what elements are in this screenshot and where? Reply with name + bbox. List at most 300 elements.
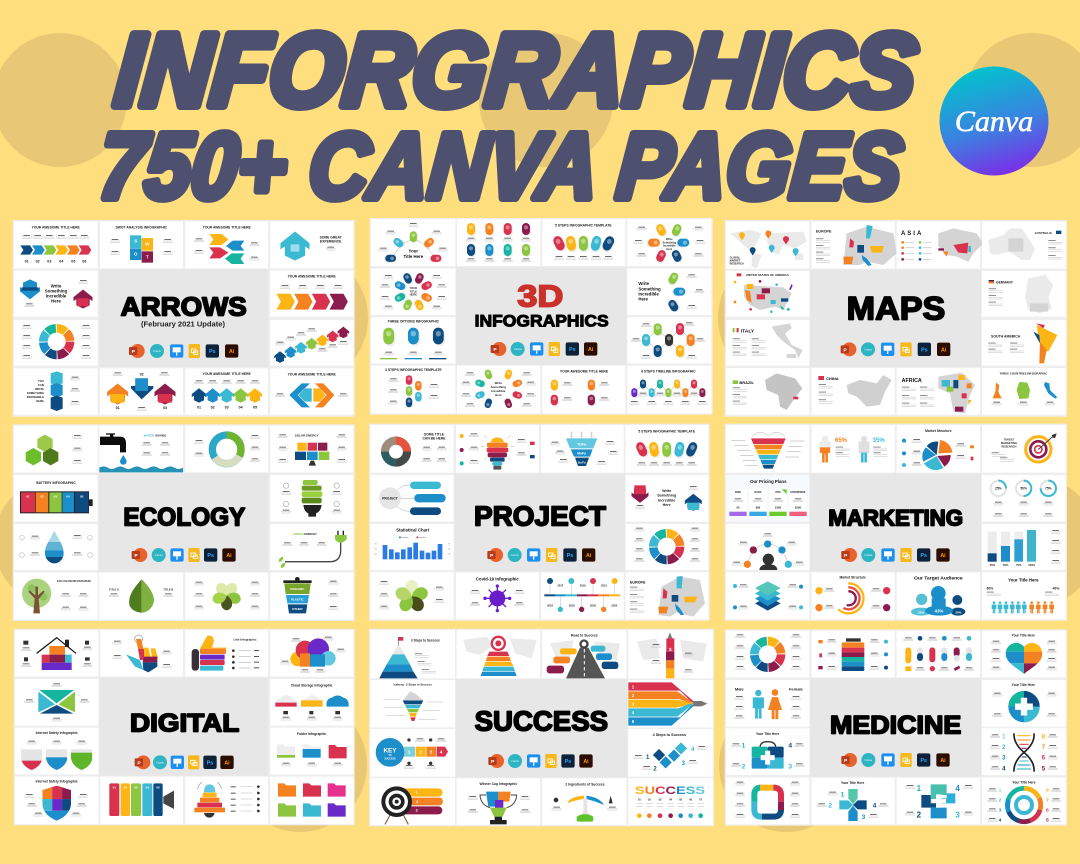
centre card: ARROWS: (February 2021 Update) <box>141 322 225 329</box>
tile: pointing hand <box>100 630 183 677</box>
tile: eight capsule ring: Here <box>495 393 502 397</box>
tile: DNA: 8 <box>1042 733 1046 740</box>
tile: six arrows: 06 <box>82 259 86 263</box>
tile: leaf: TITLE B <box>163 588 173 592</box>
centre card: ECOLOGY: ECOLOGY <box>123 504 246 531</box>
tile: rocket bands: 4 <box>632 710 635 715</box>
icon: Canva badge <box>940 66 1048 176</box>
icon row: software apps: Ps <box>920 553 927 559</box>
tile: medical kit <box>726 728 809 775</box>
tile: ribbons: YOU <box>38 379 44 383</box>
tile: four-part ring: CAN BE HERE <box>423 436 446 440</box>
tile: percent rings: 50% <box>1020 487 1027 491</box>
tile: target: RESEARCH <box>1002 444 1017 448</box>
tile: SWOT: W <box>145 241 150 246</box>
tile: arrow ring <box>14 320 98 366</box>
tile: ribbons <box>14 368 98 415</box>
icon row: software apps: P <box>137 760 141 766</box>
tile: cross leaves: 1 <box>841 792 845 799</box>
tile: global map: MARKET <box>730 259 741 262</box>
tile: bulb <box>456 425 539 473</box>
tile: capsule arc <box>371 219 455 266</box>
icon row: software apps: Ps <box>207 553 214 559</box>
tile: eight step cross ring: 5 <box>1046 817 1049 823</box>
tile: percent rings: 25% <box>995 487 1002 491</box>
tile: road: Road to Success <box>571 633 598 637</box>
icon row: software apps: Ai <box>586 553 592 559</box>
tile: eight capsule ring: Incredible <box>491 389 506 393</box>
tile: six arrows: 01 <box>25 259 29 263</box>
tile: write something: Incredible <box>46 293 67 298</box>
tile: six arrows: 02 <box>36 259 40 263</box>
centre card: MEDICINE <box>810 678 981 777</box>
tile: Europe map <box>812 222 897 269</box>
tile: green energy plug <box>270 524 353 570</box>
tile: eight petals: YOUR <box>409 286 417 290</box>
tile: mountain <box>370 630 455 678</box>
tile: cloud storage: Cloud Storage Infographic <box>291 683 333 687</box>
panel: ecology <box>13 424 355 621</box>
icon row: software apps: Canva <box>153 349 161 353</box>
tile: ribbons: SOMETHING <box>27 391 45 395</box>
icon row: software apps: Canva <box>155 553 163 557</box>
tile: cross leaves: Your Title Here <box>841 781 864 785</box>
tile: rising arrows <box>270 320 353 366</box>
panel: success <box>369 629 714 826</box>
centre card: ECOLOGY <box>99 473 268 572</box>
tile: DNA <box>982 728 1066 775</box>
tile: key to success: 2 <box>419 750 422 755</box>
tile: iceberg <box>370 680 455 727</box>
tile: Brazil map <box>726 368 809 415</box>
tile: like thumb: Like Infographic <box>233 637 257 641</box>
tile: five arrows: 02 <box>211 406 215 410</box>
icon row: software apps <box>488 754 593 768</box>
tile: three big arrows: 03 <box>163 406 167 410</box>
tile: project mind map: PROJECT <box>382 497 398 501</box>
tile: six capsules ring <box>627 219 711 266</box>
tile: safety shield <box>15 777 98 824</box>
tile: road <box>542 630 626 678</box>
tile: recycling bin: ORGANIC <box>290 587 305 591</box>
tile: write something <box>14 271 98 317</box>
tile: three big arrows: 01 <box>116 406 120 410</box>
tile: rocket tower <box>628 630 713 678</box>
tile: plus: 2 <box>917 811 922 820</box>
tile: medical kit: 1 <box>742 743 746 750</box>
tile: pricing plans: BASIC <box>754 491 762 494</box>
tile: target pills <box>370 778 455 825</box>
tile: SWOT: S <box>134 239 137 244</box>
tile: medical ring <box>726 631 809 677</box>
panel: medicine <box>725 629 1067 826</box>
tile: six arrows: YOUR AWESOME TITLE HERE <box>32 226 81 230</box>
tile: write something: Here <box>51 298 61 303</box>
tile: timeline: 2022 <box>611 604 618 608</box>
tile: timeline: 2019 <box>580 584 586 588</box>
tile: write something: Write <box>51 283 62 288</box>
tile: cylinder bars: 75% <box>1016 563 1022 567</box>
tile: iceberg: Iceberg - 5 Steps to Success <box>393 682 432 686</box>
tile: market pie: Market Structure <box>925 429 952 433</box>
centre card: PROJECT <box>454 473 625 572</box>
tile: Europe map: EUROPE <box>816 230 832 234</box>
tile: solar energy: SOLAR ENERGY <box>295 433 319 437</box>
tile: eco bulb <box>270 475 353 522</box>
tile: medical kit: 2 <box>742 763 746 770</box>
tile: pricing plans: $299 <box>795 506 801 510</box>
tile: video camera panels: 01 <box>113 785 116 789</box>
tile: five capsules <box>626 425 708 473</box>
tile: DNA: 7 <box>1042 744 1046 751</box>
tile: head arc <box>726 524 809 570</box>
tile: recycling bin: OTHER <box>292 607 303 611</box>
tile: three big arrows <box>100 368 183 415</box>
centre card: MEDICINE: MEDICINE <box>830 713 961 740</box>
icon row: software apps: Ai <box>588 347 594 353</box>
tile: five arrows: 05 <box>253 406 257 410</box>
icon row: software apps: P <box>132 349 136 355</box>
tile: ribbons: HERE <box>36 399 44 403</box>
tile: percent rings: 75% <box>1045 487 1052 491</box>
tile: target <box>982 425 1066 473</box>
tile: eight step cross ring: Your Title Here <box>1012 781 1036 785</box>
tile: Germany map: GERMANY <box>996 280 1014 284</box>
tile: people row: 60% <box>987 587 993 591</box>
tile: six arrows: 04 <box>59 259 64 263</box>
tile: mountain: 3 Steps to Success <box>411 638 440 642</box>
tile: write something capsules: Here <box>638 297 649 302</box>
tile: two ingredients: 2 Ingredients of Success <box>565 782 605 786</box>
tile: two-tone capsules <box>897 631 980 677</box>
tile: water drop <box>14 524 98 570</box>
tile: folder infographic: Folder Infographic <box>297 732 326 736</box>
tile: Italy map: ITALY <box>741 328 755 334</box>
tile: Australia map: AUSTRALIA <box>1035 231 1053 235</box>
tile: DNA: 6 <box>1042 755 1046 762</box>
tile: Germany map <box>982 271 1066 317</box>
tile: global map: GLOBAL <box>730 256 741 259</box>
tile: four steps to success: 4 <box>691 747 695 753</box>
tile: six capsules ring: Incredible <box>663 244 676 248</box>
tile: plus: 3 <box>955 811 960 820</box>
tile: funnel: BoFu <box>578 460 586 464</box>
tile: key to success: TO <box>388 755 392 757</box>
tile: eight step cross ring: 6 <box>1046 808 1049 814</box>
tile: success letters: 04 <box>669 799 673 802</box>
tile: pricing plans: $199 <box>775 506 781 510</box>
tile: male and female: Female <box>789 686 804 691</box>
icon row: software apps: P <box>134 553 138 559</box>
tile: battery: 01 <box>26 494 30 498</box>
tile: Europe map <box>626 572 708 619</box>
tile: Brazil map: BRAZIL <box>739 380 755 385</box>
tile: eight petals <box>371 269 455 315</box>
tile: cross leaves: 3 <box>862 814 866 821</box>
tile: four steps to success <box>628 729 713 777</box>
icon row: software apps: Ai <box>226 553 232 559</box>
tile: six folders <box>270 777 353 824</box>
tile: success letters: 01 <box>638 799 641 802</box>
tile: pricing plans: $99 <box>756 506 761 510</box>
icon row: software apps: Ps <box>569 347 576 353</box>
title: two-line headline: INFORGRAPHICS <box>111 13 921 127</box>
tile: eight step cross ring: 8 <box>1046 788 1049 794</box>
tile: success letters <box>628 778 713 825</box>
tile: plus: 1 <box>917 784 922 793</box>
tile: medical kit: Your Title Here <box>756 732 779 736</box>
tile: four-part ring: SOME TITLE <box>424 432 445 436</box>
tile: capsule arc: Title Here <box>404 254 424 259</box>
tile: three big arrows: 02 <box>140 372 144 376</box>
title: two-line headline: 750+ CANVA PAGES <box>95 114 906 218</box>
tile: DNA: 5 <box>1042 765 1046 772</box>
tile: capsule arc: Your <box>409 249 418 254</box>
icon row: software apps <box>841 342 950 356</box>
tile: six capsules with hub <box>627 317 711 363</box>
centre card: DIGITAL <box>99 677 268 776</box>
icon row: software apps <box>135 755 234 769</box>
tile: battery: 04 <box>66 494 70 498</box>
centre card: SUCCESS: SUCCESS <box>475 705 608 736</box>
tile: target audience: 32% <box>918 610 924 614</box>
tile: five arrows: YOUR AWESOME TITLE HERE <box>203 372 252 376</box>
tile: target audience: Our Target Audience <box>914 576 963 582</box>
tile: video camera panels: 04 <box>146 785 149 789</box>
tile: write something capsules: Incredible <box>638 292 659 297</box>
icon row: software apps: Canva <box>864 758 873 762</box>
tile: percent people: 65% <box>835 438 848 444</box>
tile: Australia map <box>982 222 1066 269</box>
tile: tree: ECO CHAIN INFOGRAPHIC <box>57 579 91 583</box>
icon: Canva badge: Canva <box>955 105 1033 138</box>
tile: timeline: 2021 <box>601 584 607 588</box>
tile: rocket bands <box>628 680 713 727</box>
tile: green energy plug: GREEN ENERGY <box>293 532 317 536</box>
tile: five arrows: 01 <box>197 406 201 410</box>
tile: write something capsules: Something <box>638 286 661 291</box>
tile: four capsules: YOUR AWESOME TITLE HERE <box>560 370 609 374</box>
tile: China map: CHINA <box>826 376 839 381</box>
tile: four steps to success: 3 <box>682 761 686 767</box>
tile: six arrows: 03 <box>47 259 51 263</box>
icon row: software apps: P <box>844 758 848 764</box>
tile: target audience: 25% <box>955 610 962 614</box>
panel: 3D infographics <box>370 218 713 415</box>
tile: envelope <box>15 679 98 726</box>
tile: eight capsule ring: Write <box>495 381 502 385</box>
tile: five petal flower <box>370 572 454 619</box>
tile: radial arcs: Market Structure <box>839 575 866 579</box>
tile: target pills: 3 <box>416 809 418 813</box>
tile: like thumb <box>185 630 268 677</box>
icon row: software apps <box>487 548 595 562</box>
tile: write something capsules <box>627 269 711 315</box>
tile: folder infographic <box>270 728 353 774</box>
tile: eight step cross ring <box>982 778 1066 824</box>
tile: pricing plans: $0 <box>737 506 740 510</box>
tile: opposing chevrons: YOUR AWESOME TITLE HERE <box>288 372 337 376</box>
tile: crossing arrows <box>185 222 268 268</box>
tile: target pills: 2 <box>416 800 418 804</box>
tile: pricing plans: FREE <box>735 492 742 494</box>
tile: success letters: 03 <box>659 799 662 802</box>
tile: recycle <box>14 426 98 472</box>
tile: rocket bands: 5 <box>632 719 635 724</box>
tile: covid infographic: Covid-19 Infographic <box>476 576 519 581</box>
tile: internet safety shields <box>15 728 98 774</box>
icon row: software apps: Canva <box>511 759 519 763</box>
tile: cloud puzzle <box>270 630 353 677</box>
tile: key to success: KEY <box>383 747 397 754</box>
tile: covid infographic <box>456 572 539 619</box>
tile: stacked layers <box>726 572 809 619</box>
tile: winner cup <box>457 778 540 825</box>
centre card: MAPS <box>810 269 981 367</box>
tile: five arrows: 03 <box>225 406 229 410</box>
tile: SWOT <box>100 222 183 268</box>
tile: battery: 02 <box>40 494 44 498</box>
centre card: MARKETING <box>810 473 981 572</box>
tile: three step capsules: 3 STEPS INFOGRAPHIC TEMPLATE <box>385 368 442 372</box>
tile: target: TARGET <box>1004 438 1015 442</box>
tile: success letters: 05 <box>679 799 683 802</box>
tile: cross leaves <box>812 778 895 824</box>
tile: big up arrow: EXPERIENCE <box>320 240 342 244</box>
tile: Africa map: AFRICA <box>902 378 922 384</box>
tile: square cross ring <box>726 778 809 824</box>
tile: four-part ring <box>370 425 454 473</box>
tile: six arrows <box>14 222 98 268</box>
tile: six capsules ring: Write <box>666 237 673 241</box>
tile: timeline: 2018 <box>569 604 575 608</box>
centre card: 3D infographics: INFOGRAPHICS <box>475 312 609 331</box>
icon row: software apps: P <box>491 759 495 765</box>
tile: write something: Something <box>45 288 68 293</box>
tile: battery <box>14 475 98 522</box>
tile: South America map: SOUTH AMERICA <box>991 334 1021 338</box>
tile: key to success <box>370 729 455 777</box>
tile: China map <box>812 368 895 415</box>
tile: circle cross <box>982 680 1066 727</box>
tile: circle cross: Your Title Here <box>1012 683 1035 687</box>
tile: people row <box>982 572 1066 619</box>
icon row: software apps: Ai <box>941 347 947 353</box>
tile: crossing arrows: YOUR AWESOME TITLE HERE <box>203 225 252 229</box>
centre card: MAPS: MAPS <box>847 290 945 326</box>
icon row: software apps: Canva <box>511 553 519 557</box>
tile: SWOT: T <box>146 255 149 260</box>
tile: rocket bands: 1 <box>632 684 635 689</box>
tile: four steps to success: 4 Steps to Success <box>653 733 686 737</box>
tile: winner cup: Winner Cup Infographic <box>479 782 517 786</box>
tile: three step capsules <box>371 366 455 413</box>
tile: cross leaves: 4 <box>873 803 877 810</box>
tile: four capsules <box>542 366 625 413</box>
tile: eight capsule ring <box>457 366 540 413</box>
tile: four arrows <box>270 271 353 317</box>
tile: write something capsules: Write <box>638 281 650 286</box>
icon row: software apps: Ps <box>567 553 573 559</box>
tile: USA map <box>726 271 809 317</box>
tile: heart <box>982 631 1066 677</box>
tile: six arrows: 05 <box>71 259 75 263</box>
tile: pricing plans: Our Pricing Plans <box>750 479 787 484</box>
tile: USA map: UNITED STATES OF AMERICA <box>746 273 790 277</box>
tile: internet safety shields: Internet Safety Infographic <box>36 731 78 735</box>
tile: big up arrow <box>270 222 353 268</box>
tile: percent people: 35% <box>873 438 885 444</box>
tile: key to success: 4 <box>440 750 443 755</box>
tile: market pie <box>897 425 980 473</box>
tile: video camera panels: 03 <box>134 785 138 789</box>
tile: eight-part ring <box>626 524 708 570</box>
tile: rocket tower: $ <box>669 647 672 652</box>
icon row: software apps <box>132 548 236 562</box>
tile: statistical chart: Statistical Chart <box>396 527 430 532</box>
tile: timeline: 2020 <box>590 604 596 608</box>
panel: marketing <box>725 424 1067 621</box>
tile: timeline: 2016 <box>547 604 553 608</box>
icon row: software apps: Ps <box>920 758 927 764</box>
icon row: software apps: Ai <box>583 759 589 765</box>
tile: write something arrows <box>626 475 708 522</box>
tile: ribbons: WRITE <box>35 387 44 391</box>
tile: rocket bands: 3 <box>632 701 635 706</box>
tile: people row: Your Title Here <box>1008 577 1039 582</box>
tile: eight step cross ring: 4 <box>999 817 1002 823</box>
tile: SWOT: SWOT ANALYSIS INFOGRAPHIC <box>116 226 168 230</box>
tile: bell <box>185 777 268 824</box>
tile: percent rings <box>982 475 1066 522</box>
icon row: software apps: Ai <box>940 553 946 559</box>
tile: video camera panels: 05 <box>156 785 160 789</box>
tile: eight petals: TITLE <box>410 289 417 293</box>
tile: battery: BATTERY INFOGRAPHIC <box>36 481 76 485</box>
icon row: software apps: P <box>490 553 494 559</box>
tile: people row: 40% <box>1053 587 1059 591</box>
tile: write something arrows: Incredible <box>658 498 675 502</box>
tile: five steps: 5 STEPS INFOGRAPHIC TEMPLATE <box>555 224 612 228</box>
tile: four steps to success: 2 <box>653 767 657 773</box>
tile: four steps to success: 1 <box>646 755 650 761</box>
tile: video camera panels <box>100 777 183 824</box>
panel: digital <box>14 629 355 825</box>
tile: key to success: 1 <box>408 750 411 755</box>
tile: project mind map <box>370 475 454 522</box>
tile: timeline <box>541 572 624 619</box>
tile: colourful funnel <box>726 425 809 473</box>
tile: write something arrows: Here <box>663 503 671 507</box>
tile: timeline capsules: 8 STEPS TIMELINE INFOGRAPHIC <box>641 369 696 373</box>
icon row: software apps: Ps <box>921 347 928 353</box>
centre card: 3D infographics: 3D <box>517 280 563 314</box>
tile: eight step cross ring: 3 <box>999 808 1002 814</box>
tile: eight step cross ring: 2 <box>999 798 1002 804</box>
tile: funnel <box>541 425 624 473</box>
tile: cylinder bars: 50% <box>1003 563 1009 567</box>
tile: five capsules: 5 STEPS INFOGRAPHIC TEMPLATE <box>638 429 696 433</box>
tile: write something arrows: Something <box>657 494 676 498</box>
tile: pricing plans <box>726 475 809 522</box>
tile: opposing chevrons <box>270 368 353 415</box>
tile: cylinder bars: 100% <box>1028 563 1036 567</box>
icon row: software apps: Canva <box>156 760 164 764</box>
tile: battery: 05 <box>80 494 84 498</box>
tile: medical kit: 4 <box>788 743 792 750</box>
tile: DNA: 3 <box>1002 755 1006 762</box>
tile: recycling bin <box>270 573 353 619</box>
